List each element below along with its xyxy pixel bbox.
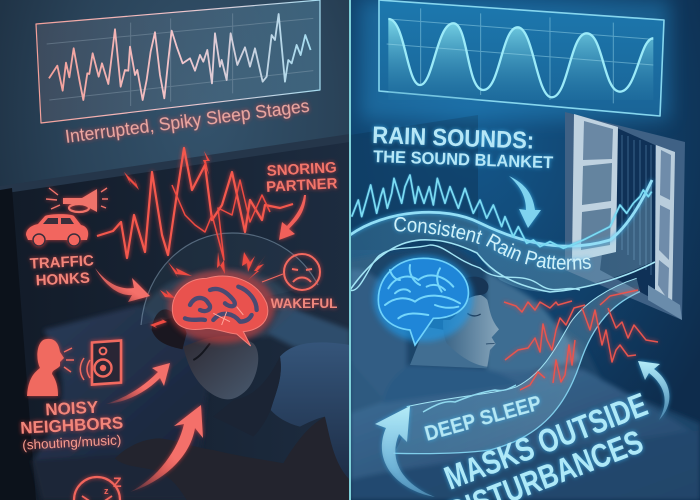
chart panel: smooth sleep wave	[360, 0, 670, 120]
wall background	[350, 0, 700, 500]
wall background	[0, 0, 349, 186]
left panel: disrupted sleep	[0, 0, 350, 500]
label: traffic honks: HONKS	[35, 270, 90, 289]
label: consistent rain patterns	[393, 231, 596, 270]
rain wave small	[350, 245, 580, 291]
arm	[115, 417, 350, 500]
neck shadow	[270, 358, 281, 410]
bedding and pillow	[32, 270, 350, 500]
arrow: from snoring sleeper	[130, 405, 203, 492]
brain: calm	[373, 255, 473, 345]
neck	[410, 327, 493, 368]
face	[443, 293, 499, 367]
lower band	[393, 278, 640, 454]
outside disturbance spikes	[504, 290, 658, 390]
window with rain	[565, 112, 685, 320]
arrow: from snoring partner	[279, 195, 306, 240]
label: noisy neighbors	[20, 398, 124, 453]
headboard wall and shaded area	[352, 244, 700, 433]
heading: interrupted sleep stages: Interrupted, Spiky Sleep Stages	[64, 96, 311, 147]
label: traffic honks: TRAFFIC	[29, 252, 94, 273]
headboard	[0, 138, 350, 500]
label: noisy neighbors: NOISY	[45, 398, 99, 419]
icon: noisy neighbor speaker	[27, 339, 121, 396]
upper bed fold	[351, 366, 382, 412]
person sleeping peacefully	[410, 277, 499, 368]
icon: wakeful face	[262, 254, 320, 290]
label: deep sleep: DEEP SLEEP	[422, 392, 544, 446]
arrow: right upward sweep	[638, 361, 669, 420]
rain sound spikes	[352, 175, 652, 248]
arrow: down to sound blanket	[509, 176, 541, 228]
sound blanket wave bands	[350, 180, 655, 454]
icon: lightning bolts	[124, 151, 266, 328]
label: snoring partner: PARTNER	[266, 175, 338, 196]
bedding right	[350, 243, 700, 500]
noise waveform	[97, 148, 293, 260]
label: traffic honks	[29, 252, 94, 289]
label: noisy neighbors: NEIGHBORS	[20, 413, 124, 438]
heading: rain sounds: THE SOUND BLANKET	[373, 147, 554, 172]
right panel: rain sounds: Consistent Rain Patterns	[392, 215, 592, 272]
heading: rain sounds: RAIN SOUNDS:	[372, 122, 535, 155]
pillow	[487, 270, 580, 377]
chart panel: spiky sleep stages	[36, 0, 320, 123]
shirt	[271, 342, 350, 480]
icon: snoring face: Z	[113, 474, 122, 490]
arrow: left upward sweep	[375, 406, 435, 497]
center divider	[349, 0, 351, 500]
label: snoring partner: SNORING	[266, 159, 337, 180]
blanket	[350, 369, 700, 500]
icon: snoring face: z	[104, 486, 109, 496]
hair	[440, 277, 488, 320]
label: snoring partner	[266, 159, 338, 196]
icon: snoring face	[74, 474, 122, 500]
brain: overstimulated	[168, 270, 275, 346]
label: wakeful: WAKEFUL	[271, 296, 337, 311]
right panel: rain sounds	[351, 0, 700, 500]
dome around head	[141, 233, 318, 325]
label: noisy neighbors: (shouting/music)	[22, 432, 122, 453]
head	[183, 336, 258, 399]
hair	[152, 309, 187, 349]
icon: car	[26, 214, 88, 246]
heading: rain sounds	[372, 122, 554, 172]
arrow: from noisy neighbors	[106, 363, 170, 404]
person sleeping	[115, 309, 350, 500]
icon: car horn	[46, 188, 108, 212]
arrow: from traffic honks	[95, 268, 150, 302]
